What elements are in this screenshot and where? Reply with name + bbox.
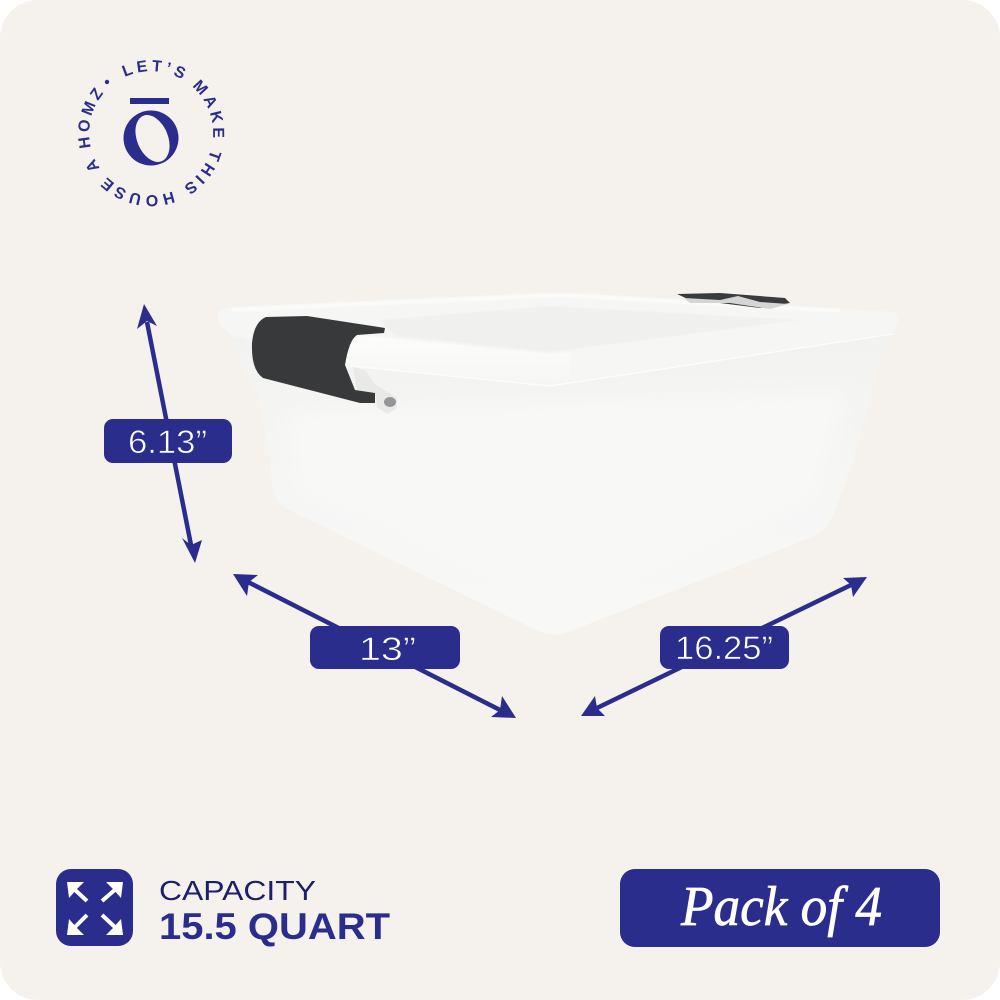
lid band lower edge bbox=[350, 334, 893, 386]
latch tab bbox=[353, 367, 397, 414]
height value: 6.13” bbox=[128, 424, 207, 460]
lid inner window bbox=[380, 306, 800, 352]
latch pin bbox=[384, 397, 396, 407]
badge text: Pack of 4 bbox=[680, 876, 882, 938]
capacity heading: CAPACITY bbox=[159, 875, 316, 906]
logo badge bbox=[78, 60, 224, 206]
width arrow bbox=[233, 574, 516, 718]
dimension: depth bbox=[581, 577, 867, 716]
capacity value: 15.5 QUART bbox=[159, 906, 390, 947]
logo mark bar bbox=[130, 98, 169, 104]
width value: 13” bbox=[359, 631, 416, 667]
box body bbox=[230, 335, 892, 635]
icon: expand arrows bbox=[56, 869, 133, 946]
height arrow bbox=[137, 304, 202, 563]
height label bbox=[104, 419, 232, 463]
depth label bbox=[660, 626, 789, 669]
dimension: width bbox=[233, 574, 516, 718]
badge background bbox=[620, 869, 940, 947]
box inner shading bbox=[285, 390, 850, 610]
pack of 4 badge bbox=[620, 869, 940, 947]
logo dot bbox=[105, 80, 109, 84]
capacity block bbox=[56, 869, 390, 947]
dimension: height bbox=[104, 304, 232, 563]
depth arrow bbox=[581, 577, 867, 716]
lid top surface bbox=[218, 292, 898, 387]
lid front band left bbox=[345, 335, 570, 386]
lid rim highlight bbox=[232, 295, 840, 311]
black clip rear bbox=[677, 293, 790, 309]
storage box product image bbox=[218, 292, 898, 635]
logo circular tagline: LET’S MAKE THIS HOUSE A HOMZ bbox=[78, 60, 224, 206]
logo mark ring bbox=[124, 110, 178, 167]
black clip front bbox=[252, 316, 385, 403]
lid front band right bbox=[550, 312, 898, 386]
width label bbox=[310, 626, 460, 669]
depth value: 16.25” bbox=[675, 630, 773, 666]
